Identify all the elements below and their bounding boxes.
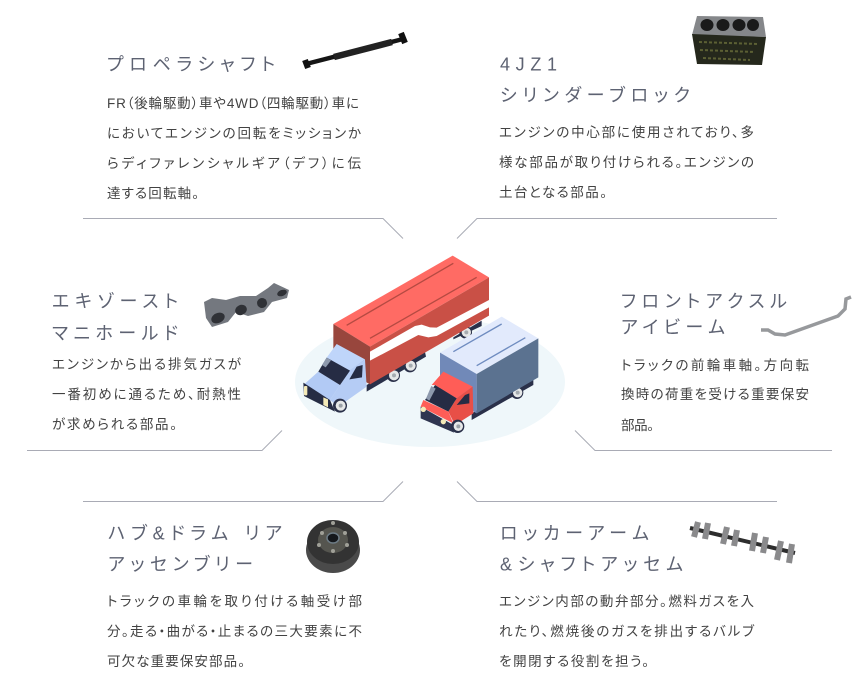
connector line xyxy=(27,430,282,450)
description: らディファレンシャルギア（デフ）に伝 xyxy=(107,155,362,171)
heading line 2: アイビーム xyxy=(621,318,725,338)
icon: rocker arm shaft xyxy=(690,522,795,563)
icon: propeller shaft xyxy=(305,33,405,68)
heading: フロントアクスル xyxy=(621,292,787,312)
heading line 2: マニホールド xyxy=(52,324,178,344)
description: 達する回転軸。 xyxy=(107,186,199,201)
description xyxy=(621,357,810,433)
heading line 2: &シャフトアッセム xyxy=(500,554,683,574)
panel: hub and drum xyxy=(83,482,403,669)
panel: exhaust manifold xyxy=(27,283,289,450)
illustration: two trucks on ground ellipse xyxy=(295,256,565,447)
description: 換時の荷重を受ける重要保安 xyxy=(621,387,809,402)
description: トラックの前輪車軸。方向転 xyxy=(621,357,810,373)
description: 分。走る・曲がる・止まるの三大要素に不 xyxy=(107,624,362,639)
description: れたり、燃焼後のガスを排出するバルブ xyxy=(499,623,755,639)
small truck xyxy=(421,317,538,433)
description: を開閉する役割を担う。 xyxy=(499,654,649,669)
icon: axle beam xyxy=(761,297,851,335)
description xyxy=(499,124,754,200)
heading: ハブ&ドラム リア xyxy=(108,522,282,544)
panel: propeller shaft xyxy=(83,33,405,238)
description xyxy=(499,593,755,669)
description: エンジンから出る排気ガスが xyxy=(52,357,242,372)
heading: 4JZ1 xyxy=(500,54,557,74)
description: FR（後輪駆動）車や4WD（四輪駆動）車に xyxy=(107,96,359,111)
description: エンジン内部の動弁部分。燃料ガスを入 xyxy=(499,593,754,609)
heading line 2: アッセンブリー xyxy=(108,554,253,574)
heading line 2: シリンダーブロック xyxy=(500,84,690,106)
connector line xyxy=(575,430,832,450)
description: が求められる部品。 xyxy=(52,417,177,432)
connector line xyxy=(457,482,777,502)
heading: プロペラシャフト xyxy=(107,54,275,74)
panel: front axle xyxy=(575,292,851,450)
connector line xyxy=(83,482,403,502)
description: 可欠な重要保安部品。 xyxy=(107,654,245,669)
panel: cylinder block xyxy=(457,16,777,238)
description: トラックの車輪を取り付ける軸受け部 xyxy=(107,594,362,609)
description: 部品。 xyxy=(621,418,654,433)
icon: engine block xyxy=(692,16,766,65)
description xyxy=(107,96,362,201)
heading: ロッカーアーム xyxy=(500,524,649,544)
panel: rocker arm xyxy=(457,482,795,669)
icon: manifold xyxy=(204,283,289,327)
connector line xyxy=(457,218,777,238)
description: においてエンジンの回転をミッションか xyxy=(107,126,362,141)
ground ellipse xyxy=(295,317,565,447)
description: エンジンの中心部に使用されており、多 xyxy=(499,124,754,140)
large truck xyxy=(303,256,489,413)
heading: エキゾースト xyxy=(52,292,178,312)
icon: hub drum xyxy=(306,520,360,573)
connector line xyxy=(83,218,403,238)
description: 土台となる部品。 xyxy=(499,185,607,200)
description: 様な部品が取り付けられる。エンジンの xyxy=(499,155,754,170)
description xyxy=(107,594,362,669)
description: 一番初めに通るため、耐熱性 xyxy=(52,387,241,402)
description xyxy=(52,357,242,432)
